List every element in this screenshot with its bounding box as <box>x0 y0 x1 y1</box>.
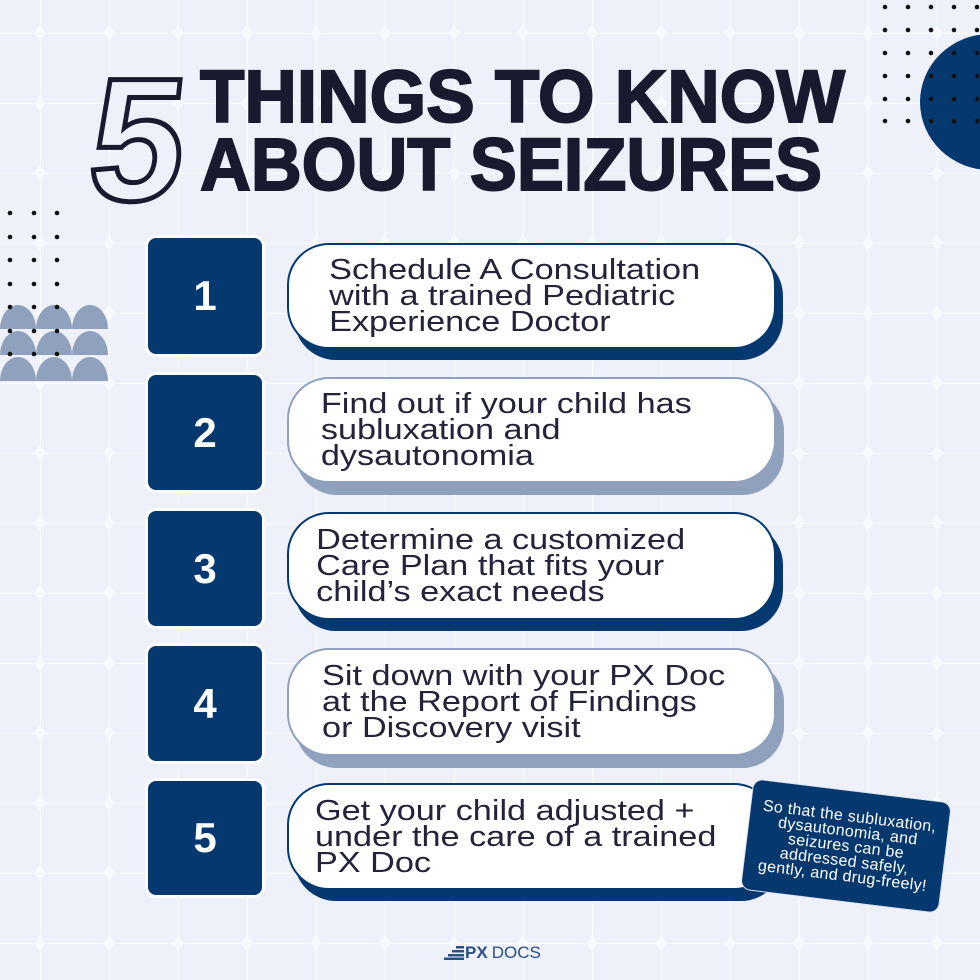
step 1 text: Schedule A Consultation <box>329 254 700 286</box>
step 2 text: dysautonomia <box>321 440 534 472</box>
logo: DOCS <box>492 943 541 962</box>
step 3 text: child’s exact needs <box>316 576 605 608</box>
step 3 text <box>287 512 776 620</box>
step 3 number <box>148 511 262 626</box>
step 3 text: Care Plan that fits your <box>316 550 664 582</box>
step 5 text: under the care of a trained <box>315 820 716 852</box>
step 1 number <box>148 238 262 354</box>
title: line 1: THINGS TO KNOW <box>200 55 845 138</box>
decoration: left dots <box>8 210 60 356</box>
step 4 number <box>148 646 262 761</box>
decoration: top right circle <box>920 34 980 170</box>
callout: So that the subluxation, <box>762 797 937 835</box>
step 2 number <box>148 375 262 490</box>
step 5 number: 5 <box>193 814 217 861</box>
callout: gently, and drug-freely! <box>757 857 928 895</box>
step 1 text: Experience Doctor <box>329 306 611 338</box>
step 4 text: Sit down with your PX Doc <box>322 660 725 692</box>
logo <box>444 943 541 962</box>
title <box>81 42 846 230</box>
step 1 number: 1 <box>193 272 217 319</box>
decoration: left domes <box>0 305 108 381</box>
icon: logo stripes <box>444 946 464 960</box>
callout: addressed safely, <box>779 845 909 877</box>
step 2 number: 2 <box>193 408 217 456</box>
step 4 text <box>287 648 776 756</box>
step 2 text: subluxation and <box>321 414 561 446</box>
step 1 text: with a trained Pediatric <box>329 280 675 312</box>
logo: PX <box>465 943 488 962</box>
step 2 text: Find out if your child has <box>321 388 692 420</box>
step 4 number: 4 <box>193 680 217 726</box>
step 3 number: 3 <box>193 544 217 592</box>
callout: seizures can be <box>787 830 905 862</box>
step 5 text: Get your child adjusted + <box>315 794 694 826</box>
step 4 text: at the Report of Findings <box>322 686 697 718</box>
step 4 text: or Discovery visit <box>322 712 581 744</box>
step 5 text <box>287 783 776 890</box>
title: line 2: ABOUT SEIZURES <box>200 123 822 206</box>
step 2 text <box>287 377 776 483</box>
step 1 text <box>287 243 776 349</box>
decoration: top right dots <box>882 4 980 124</box>
step 3 text: Determine a customized <box>316 524 685 556</box>
callout <box>740 778 952 914</box>
step 5 number <box>148 781 262 895</box>
step 5 text: PX Doc <box>315 846 431 878</box>
callout: dysautonomia, and <box>777 814 918 848</box>
